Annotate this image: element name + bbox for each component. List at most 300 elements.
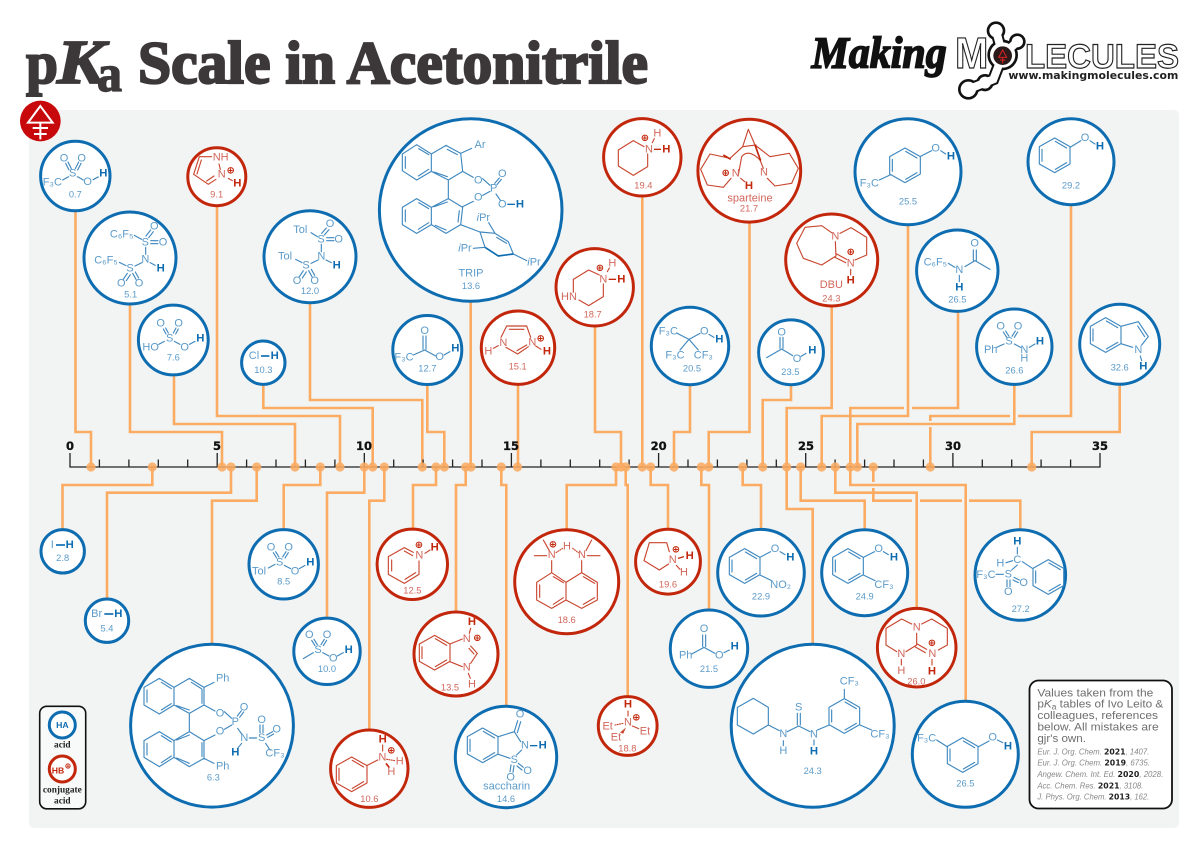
molecule: BINOL N-triflyl phosphoramide 6.3: O <box>216 707 225 719</box>
legend item: conjugate acid: HB <box>52 765 64 775</box>
molecule: TBD conjugate acid 26.0: H <box>897 665 905 677</box>
molecule: perfluoro-tert-butanol 20.5: 20.5 <box>683 364 701 374</box>
molecule: saccharin 14.6: saccharin <box>483 781 530 793</box>
molecule: pentafluoroacetanilide 26.5: C₆F₅ <box>924 257 947 269</box>
molecule: bis(pentafluorophenylsulfonyl)amine 5.1: N <box>141 254 149 266</box>
pKa axis scale 0 to 35: 0 <box>66 439 74 453</box>
molecule: piperazinium 18.7: ⊕ <box>596 263 604 274</box>
legend item: conjugate acid <box>43 756 82 807</box>
molecule: saccharin 14.6: 14.6 <box>497 794 515 804</box>
molecule: 4-trifluoromethylphenol 25.5: 25.5 <box>899 196 917 206</box>
molecule: piperazinium 18.7: H <box>617 273 625 285</box>
molecule: sulfuric acid 7.6: O <box>156 317 165 329</box>
molecule: TBD conjugate acid 26.0: ⊕ <box>928 638 936 649</box>
molecule: ditosylamine 12.0: Tol <box>293 224 307 236</box>
molecule: acetic acid 23.5: 23.5 <box>781 367 799 377</box>
molecule: hydrogen chloride 10.3 <box>242 341 285 384</box>
molecule: triethylammonium 18.8: ⊕ <box>632 712 641 723</box>
molecule: BINOL N-triflyl phosphoramide 6.3: H <box>231 747 239 759</box>
pKa axis scale 0 to 35: 20 <box>651 439 667 453</box>
molecule: bis(pentafluorophenylsulfonyl)amine 5.1: H <box>157 262 165 274</box>
molecule: sparteine 21.7: N <box>732 167 740 179</box>
molecule: benzoic acid 21.5: O <box>715 650 724 662</box>
molecule: tosic acid 8.5: O <box>284 541 293 553</box>
molecule: acetic acid 23.5: O <box>777 326 786 338</box>
molecule: hydrogen iodide 2.8: I <box>51 539 54 551</box>
molecule: proton sponge 18.6 <box>515 530 619 634</box>
molecule: perfluoro-tert-butanol 20.5: F₃C <box>665 350 685 362</box>
molecule: pyrrolidinium 19.6: H <box>686 550 694 562</box>
molecule: 4-trifluoromethylphenol 25.5: F₃C <box>860 177 879 189</box>
molecule: 2-trifluoromethylphenol 24.9: O <box>874 543 883 555</box>
molecule: 4-trifluoromethylphenol 25.5: H <box>947 151 955 163</box>
molecule: pentafluoroacetanilide 26.5: N <box>955 264 963 276</box>
molecule: bis(pentafluorophenylsulfonyl)amine 5.1: O <box>135 278 144 290</box>
molecule: TRIP phosphoric acid 13.6 <box>379 119 562 301</box>
logo: Making Molecules <box>811 21 1179 100</box>
molecule: TRIP phosphoric acid 13.6: TRIP <box>458 267 484 279</box>
molecule: piperidinium 19.4: H <box>662 143 670 155</box>
molecule: benzoic acid 21.5: 21.5 <box>700 664 718 674</box>
molecule: tosic acid 8.5 <box>249 530 318 599</box>
molecule: BINOL N-triflyl phosphoramide 6.3 <box>131 644 293 807</box>
molecule: piperidinium 19.4: ⊕ <box>641 133 649 144</box>
molecule: sulfuric acid 7.6: O <box>174 317 183 329</box>
molecule: TRIP phosphoric acid 13.6: 13.6 <box>462 281 480 291</box>
molecule: phenol 29.2: 29.2 <box>1062 180 1080 190</box>
molecule: piperazinium 18.7: HN <box>561 291 577 303</box>
title: Scale in Acetonitrile <box>138 30 648 96</box>
molecule: triethylammonium 18.8: Et <box>640 725 650 737</box>
title: p <box>26 30 58 96</box>
molecule: hydrogen bromide 5.4: 5.4 <box>101 623 113 633</box>
molecule: pentafluoroacetanilide 26.5: 26.5 <box>948 294 966 304</box>
callout: sources and references: J. Phys. Org. Chem. 2013, 162. <box>1036 792 1149 802</box>
molecule: bis(pentafluorophenylsulfonyl)amine 5.1: O <box>150 221 159 233</box>
molecule: triflic acid 0.7 <box>41 141 110 211</box>
molecule: benzenesulfonamide 26.6: O <box>1014 321 1023 333</box>
molecule: bis(pentafluorophenylsulfonyl)amine 5.1: O <box>159 236 168 248</box>
molecule: trifluoroacetic acid 12.7: H <box>451 343 459 355</box>
molecule: sulfuric acid 7.6: H <box>196 333 204 345</box>
callout: sources and references: Acc. Chem. Res. 2021, 3108. <box>1036 780 1143 790</box>
molecule: sparteine 21.7 <box>698 119 801 222</box>
molecule: Schreiner thiourea 24.3: H <box>810 746 818 758</box>
molecule: saccharin 14.6: O <box>523 765 532 777</box>
molecule: pyrazolium 9.1: N <box>218 168 226 180</box>
molecule: TBD conjugate acid 26.0: N <box>897 648 905 660</box>
molecule: trifluoroacetic acid 12.7: O <box>435 351 444 363</box>
molecule: sulfuric acid 7.6 <box>138 305 208 375</box>
molecule: triethylammonium 18.8: Et <box>611 731 621 743</box>
logo: Making Molecules: Making <box>811 27 947 77</box>
molecule: 2-nitrophenol 22.9: O <box>771 543 780 555</box>
molecule: saccharin 14.6: O <box>516 709 525 721</box>
logo: Making Molecules: www.makingmolecules.com <box>1008 70 1178 82</box>
molecule: BINOL N-triflyl phosphoramide 6.3: CF₃ <box>265 747 285 759</box>
molecule: hydrogen bromide 5.4: Br <box>91 608 103 620</box>
molecule: BINOL N-triflyl phosphoramide 6.3: O <box>216 726 225 738</box>
molecule: perfluoro-tert-butanol 20.5 <box>651 307 729 385</box>
molecule: pyridinium 12.5: H <box>431 541 439 553</box>
connectors linking molecules to the axis <box>62 197 1120 730</box>
molecule: anilinium 10.6: 10.6 <box>360 794 378 804</box>
molecule: ditosylamine 12.0: S <box>317 233 325 245</box>
molecule: benzenesulfonamide 26.6: S <box>1005 336 1013 348</box>
molecule: acetic acid 23.5: O <box>793 353 802 365</box>
molecule: hydrogen bromide 5.4 <box>85 599 129 642</box>
molecule: TBD conjugate acid 26.0: 26.0 <box>907 677 925 687</box>
molecule: ditosylamine 12.0: Tol <box>278 251 292 263</box>
callout: sources and references: Angew. Chem. Int. Ed. 2020, 2028. <box>1036 769 1163 779</box>
molecule: 2-nitrophenol 22.9: NO₂ <box>770 579 791 591</box>
molecule: pyrrolidinium 19.6: ⊕ <box>672 544 680 555</box>
molecule: pyridinium 12.5: N <box>415 550 423 562</box>
molecule: DBU conjugate acid 24.3: DBU <box>820 279 843 291</box>
molecule: sparteine 21.7: sparteine <box>727 192 773 204</box>
logo: Making Molecules: M <box>955 30 988 78</box>
callout: sources and references: colleagues, references <box>1037 710 1158 722</box>
molecule: TRIP phosphoric acid 13.6: O <box>474 192 483 204</box>
molecule: 2-nitrophenol 22.9 <box>718 529 804 616</box>
molecule: TRIP phosphoric acid 13.6: iPr <box>458 242 472 254</box>
molecule: benzyl triflone 27.2: H <box>1013 536 1021 548</box>
molecule: benzoic acid 21.5: H <box>731 641 739 653</box>
molecule: anilinium 10.6: H <box>387 766 395 778</box>
molecule: anilinium 10.6: ⊕ <box>387 745 396 756</box>
molecule: tosic acid 8.5: O <box>267 541 276 553</box>
legend item: acid: acid <box>54 740 71 750</box>
molecule: DBU conjugate acid 24.3: H <box>847 275 855 287</box>
molecule: TBD conjugate acid 26.0: H <box>928 666 936 678</box>
molecule: DBU conjugate acid 24.3: N <box>831 231 839 243</box>
legend item: conjugate acid: ⊕ <box>65 761 71 770</box>
molecule: saccharin 14.6: O <box>506 771 515 783</box>
molecule: DBU conjugate acid 24.3: ⊕ <box>846 247 855 258</box>
molecule: sparteine 21.7: 21.7 <box>740 204 758 214</box>
molecule: pyrazolium 9.1: ⊕ <box>226 165 235 176</box>
molecule: benzoic acid 21.5: O <box>700 623 709 635</box>
molecule: proton sponge 18.6: ⊕ <box>549 539 557 550</box>
molecule: triflic acid 0.7: F₃C <box>43 177 62 189</box>
callout: sources and references <box>1030 680 1172 808</box>
molecule: TBD conjugate acid 26.0 <box>877 608 956 687</box>
legend item: acid <box>49 712 75 750</box>
molecule: pentafluoroacetanilide 26.5: H <box>955 281 963 293</box>
molecule: perfluoro-tert-butanol 20.5: H <box>715 334 723 346</box>
molecule: piperazinium 18.7: 18.7 <box>584 310 602 320</box>
callout: sources and references: Values taken from the <box>1037 687 1153 699</box>
molecule: benzimidazolium 13.5: H <box>468 616 476 628</box>
molecule: pentafluoroacetanilide 26.5 <box>917 230 998 311</box>
molecule: piperidinium 19.4: N <box>645 143 653 155</box>
title: a <box>97 46 122 103</box>
molecule: imidazolium 15.1: N <box>499 337 507 349</box>
molecule: tosic acid 8.5: S <box>276 557 283 569</box>
molecule: acetic acid 23.5 <box>759 320 823 385</box>
molecule: pyrrolidinium 19.6: H <box>680 567 688 579</box>
molecule: 2-nitrophenol 22.9: 22.9 <box>752 591 770 601</box>
molecule: TBD conjugate acid 26.0: N <box>913 622 921 634</box>
molecule: benzenesulfonamide 26.6: N <box>1020 344 1028 356</box>
title: K <box>56 29 109 97</box>
molecule: triflic acid 0.7: 0.7 <box>69 190 82 200</box>
molecule: Schreiner thiourea 24.3: CF₃ <box>840 676 859 688</box>
molecule: saccharin 14.6: H <box>539 740 547 752</box>
molecule: 2-trifluoromethylphenol 24.9: 24.9 <box>856 591 874 601</box>
molecule: BINOL N-triflyl phosphoramide 6.3: 6.3 <box>207 773 220 783</box>
molecule: trifluoroacetic acid 12.7: F₃C <box>394 351 414 363</box>
molecule: benzenesulfonamide 26.6: 26.6 <box>1005 366 1023 376</box>
molecule: pyridinium 12.5: 12.5 <box>403 585 421 595</box>
callout: sources and references: tables of Ivo Leito & <box>1056 699 1164 711</box>
molecule: benzyl triflone 27.2 <box>975 530 1066 620</box>
molecule: 3-trifluoromethylphenol 26.5: O <box>988 732 997 744</box>
molecule: anilinium 10.6: H <box>379 733 387 745</box>
molecule: triflic acid 0.7: O <box>60 152 69 164</box>
molecule: tosic acid 8.5: O <box>291 565 300 577</box>
molecule: TRIP phosphoric acid 13.6: Ar <box>475 139 486 151</box>
molecule: TRIP phosphoric acid 13.6: iPr <box>477 212 490 224</box>
molecule: benzyl triflone 27.2: S <box>1005 568 1012 580</box>
molecule: ditosylamine 12.0: O <box>334 233 343 245</box>
molecule: hydrogen chloride 10.3: 10.3 <box>254 365 272 375</box>
molecule: 3-trifluoromethylphenol 26.5 <box>912 701 1018 807</box>
molecule: perfluoro-tert-butanol 20.5: O <box>700 325 709 337</box>
molecule: tosic acid 8.5: H <box>306 557 314 569</box>
molecule: hydrogen chloride 10.3: Cl <box>249 350 259 362</box>
molecule: tosic acid 8.5: 8.5 <box>277 576 290 586</box>
molecule: BINOL N-triflyl phosphoramide 6.3: O <box>257 714 266 726</box>
molecule: saccharin 14.6 <box>455 706 557 808</box>
molecule: benzoic acid 21.5: Ph <box>679 650 692 662</box>
molecule: benzyl triflone 27.2: O <box>1019 577 1028 589</box>
molecule: hydrogen iodide 2.8: 2.8 <box>56 553 69 563</box>
molecule: pyrrolidinium 19.6: 19.6 <box>659 580 677 590</box>
molecule: indole 32.6: N <box>1134 344 1142 356</box>
molecule: TRIP phosphoric acid 13.6: P <box>490 183 497 195</box>
molecule: TRIP phosphoric acid 13.6: O <box>498 198 507 210</box>
molecule: triflic acid 0.7: O <box>77 152 86 164</box>
molecule: 2-nitrophenol 22.9: H <box>786 552 794 564</box>
molecule: sparteine 21.7: N <box>760 167 768 179</box>
molecule: 3-trifluoromethylphenol 26.5: H <box>1004 741 1012 753</box>
molecule: 3-trifluoromethylphenol 26.5: 26.5 <box>956 778 974 788</box>
pKa axis scale 0 to 35: 35 <box>1092 439 1108 453</box>
molecule: 3-trifluoromethylphenol 26.5: F₃C <box>917 732 936 744</box>
molecule: sparteine 21.7: H <box>745 180 753 192</box>
molecule: triflic acid 0.7: O <box>83 176 92 188</box>
molecule: methanesulfonic acid 10.0: O <box>323 629 332 641</box>
molecule: Schreiner thiourea 24.3: H <box>779 745 787 757</box>
legend item: conjugate acid: conjugate <box>43 786 82 796</box>
legend: acid and conjugate acid <box>40 706 86 809</box>
molecule: sulfuric acid 7.6: HO <box>142 341 159 353</box>
molecule: imidazolium 15.1: ⊕ <box>536 333 545 344</box>
molecule: methanesulfonic acid 10.0: O <box>329 653 338 665</box>
molecule: hydrogen iodide 2.8: H <box>66 539 74 551</box>
molecule: bis(pentafluorophenylsulfonyl)amine 5.1: 5.1 <box>124 290 137 300</box>
molecule: proton sponge 18.6: 18.6 <box>558 615 576 625</box>
molecule: benzimidazolium 13.5: N <box>463 662 471 674</box>
callout: sources and references: Eur. J. Org. Chem. 2021, 1407. <box>1037 746 1149 756</box>
molecule: triethylammonium 18.8: 18.8 <box>618 743 636 753</box>
molecule: BINOL N-triflyl phosphoramide 6.3: Ph <box>216 761 229 773</box>
molecule: pyrazolium 9.1: H <box>233 177 241 189</box>
molecule: DBU conjugate acid 24.3: N <box>847 257 855 269</box>
molecule: pyrrolidinium 19.6 <box>636 529 700 594</box>
pKa axis scale 0 to 35: 5 <box>213 439 221 453</box>
molecule: benzyl triflone 27.2: 27.2 <box>1012 604 1030 614</box>
molecule: phenol 29.2 <box>1028 119 1114 205</box>
molecule: anilinium 10.6 <box>331 730 408 807</box>
molecule: ditosylamine 12.0: O <box>293 275 302 287</box>
molecule: TBD conjugate acid 26.0: N <box>928 648 936 660</box>
molecule: sulfuric acid 7.6: S <box>166 333 173 345</box>
molecule: benzyl triflone 27.2: H <box>996 558 1004 570</box>
molecule: bis(pentafluorophenylsulfonyl)amine 5.1 <box>84 212 176 304</box>
molecule: sulfuric acid 7.6: 7.6 <box>167 352 180 362</box>
molecule: pyrazolium 9.1: 9.1 <box>210 190 223 200</box>
molecule: DBU conjugate acid 24.3: 24.3 <box>822 293 840 303</box>
molecule: pyrazolium 9.1 <box>188 148 246 206</box>
molecule: methanesulfonic acid 10.0: H <box>345 644 353 656</box>
molecule: ditosylamine 12.0 <box>264 211 356 303</box>
molecule: proton sponge 18.6: H <box>563 541 571 553</box>
pKa axis scale 0 to 35: 15 <box>503 439 519 453</box>
molecule: triethylammonium 18.8: H <box>624 698 632 710</box>
molecule: benzyl triflone 27.2: C <box>1013 554 1021 566</box>
molecule: piperazinium 18.7: H <box>608 258 616 270</box>
molecule: hydrogen iodide 2.8 <box>41 530 84 573</box>
molecule: benzenesulfonamide 26.6: Ph <box>984 344 997 356</box>
molecule: benzoic acid 21.5 <box>670 610 748 687</box>
molecule: pentafluoroacetanilide 26.5: O <box>970 237 979 249</box>
molecule: imidazolium 15.1: H <box>543 346 551 358</box>
molecule: BINOL N-triflyl phosphoramide 6.3: O <box>240 701 249 713</box>
molecule: pyrazolium 9.1: NH <box>213 152 229 164</box>
molecule: ditosylamine 12.0: H <box>333 259 341 271</box>
molecule: hydrogen bromide 5.4: H <box>114 608 122 620</box>
molecule: indole 32.6 <box>1080 304 1160 384</box>
molecule: benzimidazolium 13.5: ⊕ <box>473 633 482 644</box>
molecule: perfluoro-tert-butanol 20.5: CF₃ <box>694 350 713 362</box>
molecule: 4-trifluoromethylphenol 25.5 <box>855 119 961 225</box>
molecule: piperazinium 18.7: N <box>599 273 607 285</box>
molecule: TRIP phosphoric acid 13.6: O <box>474 174 483 186</box>
molecule: triethylammonium 18.8: N <box>624 717 632 729</box>
molecule: 4-trifluoromethylphenol 25.5: O <box>931 142 940 154</box>
pKa axis scale 0 to 35: 30 <box>945 439 961 453</box>
molecule: anilinium 10.6: H <box>396 755 404 767</box>
molecule: bis(pentafluorophenylsulfonyl)amine 5.1: C₆F₅ <box>110 228 133 240</box>
callout: sources and references: pK <box>1037 699 1051 711</box>
molecule: trifluoroacetic acid 12.7 <box>393 316 462 384</box>
molecule: ditosylamine 12.0: O <box>310 275 319 287</box>
molecule: phenol 29.2: H <box>1096 141 1104 153</box>
molecule: Schreiner thiourea 24.3: S <box>795 701 802 713</box>
molecule: methanesulfonic acid 10.0: S <box>314 644 322 656</box>
molecule: TRIP phosphoric acid 13.6: O <box>498 168 507 180</box>
molecule: imidazolium 15.1 <box>481 311 555 384</box>
callout: sources and references: a <box>1052 702 1057 711</box>
molecule: proton sponge 18.6: N <box>578 549 586 561</box>
molecule: TRIP phosphoric acid 13.6: H <box>516 198 524 210</box>
molecule: saccharin 14.6: N <box>521 740 529 752</box>
molecule: 2-trifluoromethylphenol 24.9: CF₃ <box>874 579 894 591</box>
molecule: imidazolium 15.1: 15.1 <box>509 361 527 371</box>
molecule: triethylammonium 18.8 <box>598 697 657 755</box>
molecule: ditosylamine 12.0: S <box>302 260 310 272</box>
pKa axis scale 0 to 35: 25 <box>798 439 814 453</box>
molecule: benzenesulfonamide 26.6: O <box>996 321 1005 333</box>
molecule: methanesulfonic acid 10.0: O <box>305 629 314 641</box>
molecule: sparteine 21.7: ⊕ <box>721 168 730 179</box>
molecule: bis(pentafluorophenylsulfonyl)amine 5.1: C₆F₅ <box>94 254 118 266</box>
molecule: pyridinium 12.5 <box>377 529 447 600</box>
molecule: DBU conjugate acid 24.3 <box>786 214 878 306</box>
molecule: proton sponge 18.6: N <box>548 549 556 561</box>
callout: sources and references: below. All mistakes are <box>1037 721 1159 733</box>
molecule: tosic acid 8.5: Tol <box>252 566 266 578</box>
molecule: BINOL N-triflyl phosphoramide 6.3: Ph <box>216 673 229 685</box>
molecule: pyridinium 12.5: ⊕ <box>415 540 423 551</box>
molecule: piperidinium 19.4: 19.4 <box>634 180 652 190</box>
molecule: Schreiner thiourea 24.3 <box>731 644 894 807</box>
molecule: methanesulfonic acid 10.0 <box>294 618 360 684</box>
molecule: indole 32.6: H <box>1139 361 1147 373</box>
molecule: 2-trifluoromethylphenol 24.9: H <box>890 552 898 564</box>
molecule: ditosylamine 12.0: O <box>326 218 335 230</box>
molecule: piperazinium 18.7 <box>556 249 633 326</box>
molecule: benzyl triflone 27.2: F₃C <box>976 569 996 581</box>
molecule: bis(pentafluorophenylsulfonyl)amine 5.1: O <box>117 278 126 290</box>
molecule: benzimidazolium 13.5: N <box>463 633 471 645</box>
molecule: benzimidazolium 13.5: H <box>468 678 476 690</box>
molecule: Schreiner thiourea 24.3: N <box>779 728 787 740</box>
molecule: Schreiner thiourea 24.3: 24.3 <box>804 766 822 776</box>
molecule: benzenesulfonamide 26.6: H <box>1020 353 1028 365</box>
pKa axis scale 0 to 35: 10 <box>356 439 372 453</box>
molecule: pyrrolidinium 19.6: N <box>669 554 677 566</box>
molecule: Schreiner thiourea 24.3: CF₃ <box>870 728 890 740</box>
molecule: 2-trifluoromethylphenol 24.9 <box>822 530 908 616</box>
molecule: imidazolium 15.1: H <box>484 346 492 358</box>
molecule: BINOL N-triflyl phosphoramide 6.3: O <box>272 723 281 735</box>
molecule: bis(pentafluorophenylsulfonyl)amine 5.1: S <box>142 236 149 248</box>
molecule: benzimidazolium 13.5: 13.5 <box>441 682 459 692</box>
molecule: benzenesulfonamide 26.6 <box>977 309 1052 384</box>
molecule: BINOL N-triflyl phosphoramide 6.3: P <box>232 716 239 728</box>
molecule: sulfuric acid 7.6: O <box>180 341 189 353</box>
molecule: perfluoro-tert-butanol 20.5: F₃C <box>659 326 678 338</box>
molecule: methanesulfonic acid 10.0: 10.0 <box>318 664 336 674</box>
molecule: BINOL N-triflyl phosphoramide 6.3: N <box>240 732 248 744</box>
molecule: TRIP phosphoric acid 13.6: iPr <box>527 257 541 269</box>
molecule: bis(pentafluorophenylsulfonyl)amine 5.1: S <box>126 262 134 274</box>
molecule: benzyl triflone 27.2: O <box>1004 586 1013 598</box>
molecule: ditosylamine 12.0: N <box>317 251 325 263</box>
molecule: BINOL N-triflyl phosphoramide 6.3: S <box>258 732 265 744</box>
legend item: acid: HA <box>56 720 69 730</box>
molecule: benzimidazolium 13.5 <box>414 612 498 696</box>
molecule: anilinium 10.6: N <box>378 751 386 763</box>
icon: red brand badge <box>20 101 61 141</box>
molecule: trifluoroacetic acid 12.7: 12.7 <box>418 364 436 374</box>
molecule: triethylammonium 18.8: Et <box>602 721 613 733</box>
molecule: saccharin 14.6: S <box>511 754 518 766</box>
molecule: acetic acid 23.5: H <box>808 344 816 356</box>
